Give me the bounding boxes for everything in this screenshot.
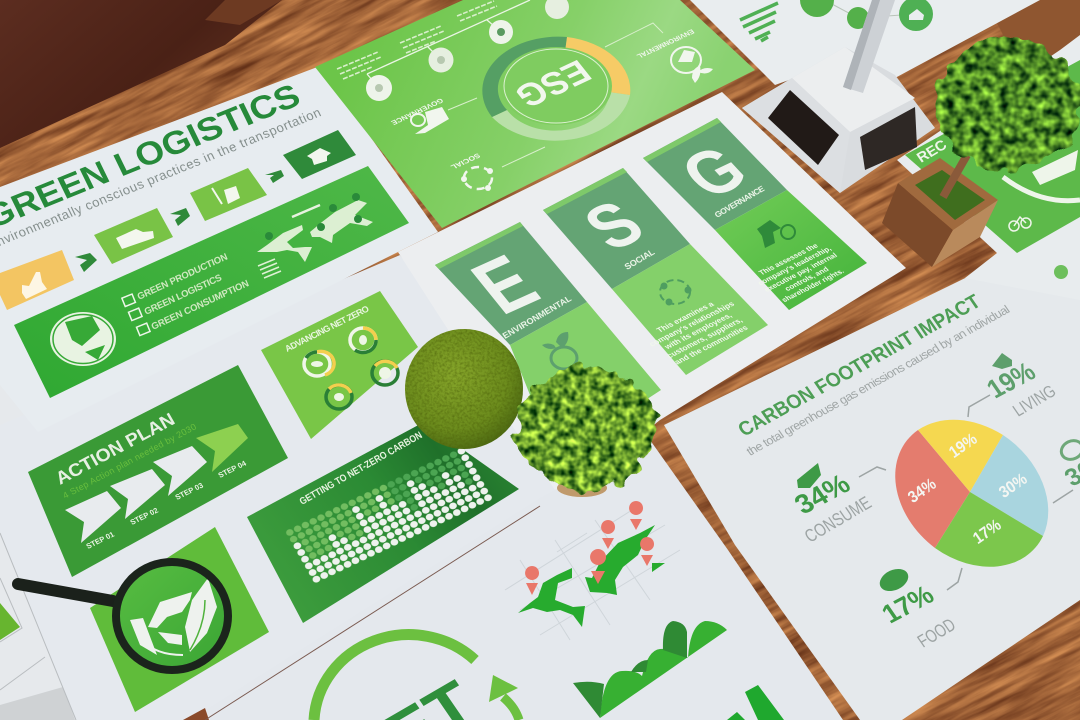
heading: GETTING TO NET-ZERO CARBON: [298, 430, 424, 508]
object: small potted plant: [517, 366, 657, 497]
paper: green logistics sheet: [0, 66, 438, 432]
body text: customers, suppliers,: [665, 316, 744, 360]
column: environmental: E: [455, 240, 555, 330]
foliage: [934, 37, 1080, 169]
paper: action plan sheet: [0, 255, 556, 720]
progress rings: [304, 328, 398, 409]
column: social: S: [569, 188, 660, 264]
column: environmental: ENVIRONMENTAL: [501, 293, 574, 341]
ESG ring segments: [482, 37, 630, 141]
stat: consume: CONSUME: [800, 492, 875, 546]
pie chart: 17%: [970, 516, 1005, 548]
panel: getting to net-zero carbon: [247, 422, 519, 623]
wheel labels and icons: GOVERNANCE: [389, 96, 444, 126]
body text: company's relationships: [647, 300, 737, 348]
column: social: [543, 168, 768, 375]
column: environmental: [435, 222, 661, 430]
map illustration: [518, 501, 665, 627]
body text: controls, and: [783, 265, 831, 293]
connector line and icon nodes: [337, 0, 569, 101]
stat: transport: [1053, 437, 1080, 503]
stat: consume: [789, 463, 886, 546]
wheel labels and icons: [389, 27, 713, 191]
trunk: [943, 155, 967, 197]
panel: advancing net zero: [261, 291, 418, 439]
heading: ACTION PLAN: [52, 409, 178, 488]
body text: shareholder rights.: [780, 267, 846, 304]
body text: This examines a: [655, 300, 716, 334]
checklist: [122, 251, 251, 336]
column: governance: GOVERNANCE: [713, 183, 767, 220]
stat: food: [876, 565, 962, 651]
object: magnifying glass: [18, 561, 229, 671]
pie chart: 34%: [905, 475, 940, 507]
planter box: [882, 158, 998, 267]
stat: living: [968, 353, 1059, 420]
panel: action plan: [28, 365, 288, 577]
main green banner: [14, 166, 409, 398]
body text: with its employees,: [662, 311, 734, 351]
subheading: the total greenhouse gas emissions caused by an individual: [744, 303, 1012, 458]
object: solar panel model: [742, 0, 935, 193]
body text: company's leadership,: [756, 244, 833, 287]
arrow: [170, 208, 190, 226]
paper: top right sheet: [690, 0, 1040, 85]
heading: ADVANCING NET ZERO: [283, 304, 371, 354]
rim: [116, 562, 228, 670]
upward arrow: [489, 675, 519, 720]
handle: [18, 584, 113, 601]
stat: living: 19%: [981, 357, 1041, 404]
checklist: GREEN CONSUMPTION: [150, 278, 251, 333]
stat: food: 17%: [876, 580, 939, 629]
world map: [257, 193, 373, 278]
wheel labels and icons: ENVIRONMENTAL: [634, 27, 695, 59]
step labels: STEP 01: [85, 530, 116, 551]
body text: and the communities: [673, 323, 750, 366]
panel: magnifier card: [90, 527, 269, 712]
object: moss ball: [405, 329, 523, 449]
step labels: [85, 458, 249, 551]
step labels: STEP 03: [174, 481, 205, 502]
icon: bank: [757, 220, 795, 248]
stacked bars icon: [740, 3, 778, 41]
paper: ESG columns sheet: [398, 92, 906, 490]
step labels: STEP 04: [217, 458, 249, 480]
step: warehouse cart: [190, 168, 267, 221]
paper: right recycling sheet: REC: [914, 137, 950, 166]
icon: globe: [50, 312, 116, 366]
panel: ESG wheel: [315, 0, 755, 228]
object: potted tree: [882, 37, 1080, 267]
panel: carbon footprint impact: [734, 265, 1080, 651]
column: governance: [643, 118, 867, 310]
pole: [843, 0, 895, 93]
checklist: GREEN PRODUCTION: [136, 251, 229, 303]
checklist: GREEN LOGISTICS: [143, 272, 224, 318]
column: social: SOCIAL: [623, 247, 657, 272]
circular arrow ring: [314, 635, 475, 720]
icon: bicycle: [1009, 217, 1031, 231]
ESG upside-down heading: ESG: [507, 53, 598, 114]
column: governance: G: [666, 133, 763, 212]
globe and leaf in lens: [130, 578, 217, 655]
panel: ESG columns: [435, 118, 867, 430]
pie chart: 19%: [946, 430, 981, 462]
connected icon nodes: [830, 3, 916, 18]
arrow: [75, 253, 97, 272]
paper: carbon footprint sheet: [664, 222, 1080, 720]
wheel connector lines: [448, 23, 663, 167]
arrow: [265, 170, 284, 183]
lens: [115, 561, 229, 671]
pie chart: 30%: [996, 470, 1031, 502]
step chevrons: [65, 424, 248, 543]
area chart hills: [573, 621, 727, 718]
corner bar chart: [727, 685, 784, 720]
body text: executive pay, internal: [762, 251, 839, 294]
heading: CARBON FOOTPRINT IMPACT: [734, 290, 985, 441]
step: delivery truck: [94, 208, 173, 264]
corner icon: [1054, 265, 1068, 279]
stat: living: LIVING: [1009, 381, 1059, 420]
step: home: [283, 130, 356, 179]
subheading: 4 Step Action plan needed by 2030: [61, 422, 198, 501]
paper: right recycling sheet: [897, 35, 1080, 300]
panel: green logistics content: [0, 76, 409, 398]
icon: leaf globe: [542, 332, 577, 369]
body text: This assesses the: [757, 241, 820, 277]
step: factory: [0, 250, 74, 310]
icon: people cycle: [660, 280, 692, 306]
dot matrix chart: [284, 446, 494, 584]
paper: bottom-left report sheet: [0, 375, 90, 720]
wheel labels and icons: SOCIAL: [448, 151, 481, 170]
stat: food: FOOD: [913, 614, 959, 651]
stat: consume: 34%: [789, 468, 856, 520]
paper: map and net-zero sheet: [183, 440, 843, 720]
step labels: STEP 02: [129, 506, 160, 527]
pie chart: [895, 420, 1048, 567]
